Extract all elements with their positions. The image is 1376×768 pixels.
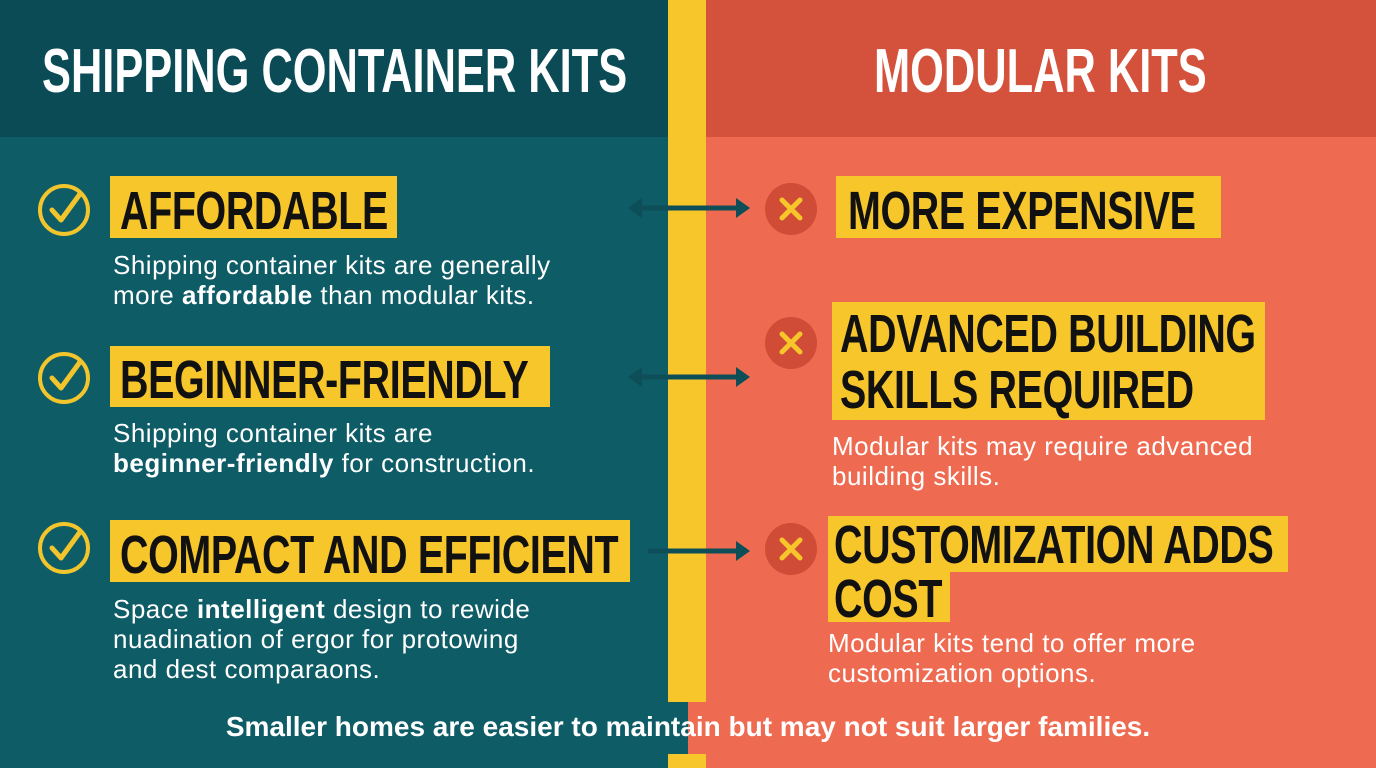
icon: x	[765, 317, 817, 369]
heading: ADVANCED BUILDING	[840, 304, 1256, 364]
item: advanced building skills	[765, 302, 1265, 491]
description: customization options.	[828, 658, 1096, 688]
icon: x	[765, 523, 817, 575]
title: shipping container kits: SHIPPING CONTAINER KITS	[42, 37, 627, 106]
heading: COMPACT AND EFFICIENT	[120, 525, 618, 585]
left header band	[0, 0, 668, 137]
label box	[836, 176, 1221, 238]
heading: AFFORDABLE	[120, 181, 388, 241]
description: Space intelligent design to rewide	[113, 594, 530, 624]
panel: left background	[0, 0, 690, 768]
yellow divider stripe	[668, 0, 706, 702]
title: modular kits: MODULAR KITS	[874, 37, 1207, 106]
description: Modular kits tend to offer more	[828, 628, 1196, 658]
description	[832, 431, 1253, 491]
right header band	[706, 0, 1376, 137]
description	[113, 594, 530, 684]
description	[828, 628, 1196, 688]
heading	[834, 515, 1273, 629]
footer note: Smaller homes are easier to maintain but may not suit larger families.	[226, 711, 1150, 742]
arrow 3	[648, 541, 750, 561]
label box	[110, 346, 550, 407]
label box	[110, 520, 630, 582]
label box	[832, 302, 1265, 420]
arrow 1	[628, 198, 750, 218]
arrows	[628, 198, 750, 561]
heading: SKILLS REQUIRED	[840, 360, 1194, 420]
label box	[110, 176, 397, 238]
item: customization adds cost	[765, 515, 1288, 688]
icon: check	[38, 184, 90, 236]
panel: right background	[688, 0, 1376, 768]
heading: CUSTOMIZATION ADDS	[834, 515, 1273, 575]
heading	[840, 304, 1256, 420]
description: Modular kits may require advanced	[832, 431, 1253, 461]
label box line 1	[828, 516, 1288, 572]
description	[113, 250, 551, 310]
label box line 2	[828, 570, 950, 622]
item: more expensive	[765, 176, 1221, 241]
description: Shipping container kits are	[113, 418, 433, 448]
description: beginner-friendly for construction.	[113, 448, 535, 478]
heading: MORE EXPENSIVE	[848, 181, 1196, 241]
icon: check	[38, 522, 90, 574]
description: Shipping container kits are generally	[113, 250, 551, 280]
description	[113, 418, 535, 478]
description: more affordable than modular kits.	[113, 280, 535, 310]
heading: BEGINNER-FRIENDLY	[120, 350, 528, 410]
description: building skills.	[832, 461, 1000, 491]
description: nuadination of ergor for protowing	[113, 624, 519, 654]
item: beginner-friendly	[38, 346, 550, 478]
icon: x	[765, 183, 817, 235]
arrow 2	[628, 367, 750, 387]
item: affordable	[38, 176, 551, 310]
item: compact and efficient	[38, 520, 630, 684]
description: and dest comparaons.	[113, 654, 380, 684]
heading: COST	[834, 569, 942, 629]
yellow divider stripe bottom	[668, 754, 706, 768]
icon: check	[38, 352, 90, 404]
